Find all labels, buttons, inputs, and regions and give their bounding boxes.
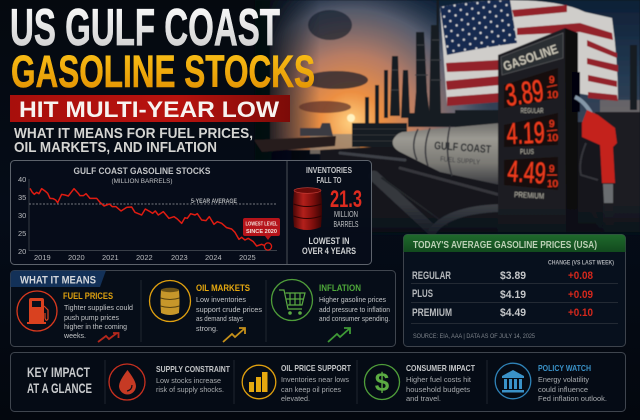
- item: inflation: Higher gasoline prices: [319, 295, 386, 304]
- price rows: PREMIUM: [412, 307, 452, 319]
- item: fuel prices: weeks.: [63, 331, 86, 340]
- item: fuel prices: Tighter supplies could: [64, 303, 133, 312]
- price screens: 4.19: [506, 117, 545, 151]
- storage tank: gulf coast fuel supply: FUEL SUPPLY: [440, 156, 481, 167]
- lowest in over 4 years: OVER 4 YEARS: [302, 246, 356, 257]
- chart title: (MILLION BARRELS): [112, 178, 172, 185]
- item: inflation: and consumer spending.: [319, 314, 390, 323]
- lowest in over 4 years: LOWEST IN: [308, 236, 350, 247]
- item: oil markets: support crude prices: [196, 305, 262, 314]
- panel: key impact at a glance: [10, 352, 626, 412]
- item: oil markets: strong.: [196, 324, 218, 333]
- item: policy watch: POLICY WATCH: [538, 363, 591, 373]
- key figure: 21.3 million barrels: MILLION: [334, 209, 358, 219]
- callout: lowest level: [243, 218, 280, 240]
- ground: [320, 147, 500, 232]
- pump sign: GASOLINE: [501, 41, 560, 74]
- refinery towers: [352, 0, 640, 232]
- inventories text: INVENTORIES: [306, 166, 353, 175]
- price rows: REGULAR: [412, 270, 451, 282]
- item: policy watch: could influence: [538, 385, 588, 394]
- price screens: 10: [547, 133, 559, 144]
- item: supply constraint: [109, 364, 231, 400]
- red banner: hit multi-year low: HIT MULTI-YEAR LOW: [19, 97, 280, 122]
- line chart: 2022: [136, 253, 153, 262]
- chart title: GULF COAST GASOLINE STOCKS: [74, 166, 210, 177]
- line chart: 2024: [205, 253, 222, 262]
- table header: TODAY'S AVERAGE GASOLINE PRICES (USA): [413, 240, 597, 251]
- line chart: 25: [18, 229, 26, 238]
- item: policy watch: Fed inflation outlook.: [538, 394, 607, 403]
- item: oil price support: elevated.: [281, 394, 310, 403]
- fuel nozzle: [575, 97, 617, 232]
- price rows: +0.08: [568, 270, 593, 282]
- line chart: 2019: [34, 253, 51, 262]
- icon: red barrel: [293, 188, 322, 230]
- item: consumer impact: Higher fuel costs hit: [406, 375, 472, 384]
- price rows: $4.49: [500, 307, 526, 319]
- arrow: red trend: [98, 333, 118, 342]
- item: inflation: add pressure to inflation: [319, 305, 390, 314]
- item: fuel prices: higher in the coming: [64, 322, 127, 331]
- key figure: 21.3 million barrels: [330, 186, 362, 229]
- item: oil markets: Low inventories: [196, 295, 246, 304]
- panel: today's average gasoline prices: CHANGE (VS LAST WEEK): [548, 260, 614, 266]
- ship: [254, 136, 336, 152]
- icon: bar chart: [242, 365, 276, 399]
- price screens: 9: [549, 75, 555, 86]
- gas pump: [498, 28, 580, 232]
- icon: shopping cart: [272, 280, 312, 320]
- item: supply constraint: SUPPLY CONSTRAINT: [156, 364, 231, 374]
- price screens: 9: [549, 164, 555, 175]
- water: [310, 134, 360, 154]
- gas pump: PLUS: [520, 149, 534, 156]
- 5-year average label: 5-YEAR AVERAGE: [191, 198, 237, 205]
- panel heading: [27, 364, 92, 396]
- section tab: WHAT IT MEANS: [20, 274, 96, 286]
- panel heading: AT A GLANCE: [27, 380, 92, 396]
- item: fuel prices: [17, 291, 133, 342]
- item: policy watch: Energy volatility: [538, 375, 589, 384]
- icon: oil barrel: [150, 280, 190, 322]
- item: oil price support: [242, 363, 352, 403]
- item: oil price support: can keep oil prices: [281, 385, 341, 394]
- key figure: 21.3 million barrels: BARRELS: [334, 219, 359, 229]
- item: oil markets: as demand stays: [196, 314, 243, 323]
- clouds: [299, 10, 368, 113]
- panel: today's average gasoline prices: [404, 234, 626, 346]
- item: supply constraint: Low stocks increase: [156, 376, 221, 385]
- callout: lowest level: SINCE 2020: [246, 229, 277, 235]
- title: [10, 0, 315, 97]
- item: fuel prices: FUEL PRICES: [63, 291, 113, 302]
- item: supply constraint: risk of supply shocks.: [156, 385, 224, 394]
- key figure: 21.3 million barrels: 21.3: [330, 186, 362, 213]
- item: consumer impact: [364, 363, 476, 403]
- subtitle: [14, 125, 253, 156]
- panel heading: KEY IMPACT: [27, 364, 90, 380]
- line chart: 2020: [68, 253, 85, 262]
- gas pump: REGULAR: [520, 108, 544, 115]
- item: consumer impact: and travel.: [406, 394, 441, 403]
- subtitle: OIL MARKETS, AND INFLATION: [14, 139, 217, 156]
- inventories text: FALL TO: [316, 176, 342, 185]
- subtitle: WHAT IT MEANS FOR FUEL PRICES,: [14, 125, 253, 142]
- price screens: 10: [547, 90, 559, 101]
- panel: stocks chart and inventories: [10, 160, 372, 264]
- item: oil price support: OIL PRICE SUPPORT: [281, 363, 352, 373]
- item: inflation: [272, 280, 390, 342]
- item: oil markets: OIL MARKETS: [196, 283, 250, 294]
- callout: lowest level: LOWEST LEVEL: [246, 222, 278, 228]
- line chart: 35: [18, 193, 26, 202]
- tank label: GULF COAST: [434, 140, 492, 156]
- flag: [440, 0, 618, 106]
- inventories text: [306, 166, 353, 185]
- arrow: gold trend: [223, 328, 245, 342]
- line chart: 30: [18, 211, 26, 220]
- icon: fuel pump: [17, 291, 57, 331]
- icon: bank building: [495, 363, 531, 399]
- line chart: [18, 175, 280, 262]
- item: oil price support: Inventories near lows: [281, 375, 349, 384]
- storage tank: gulf coast fuel supply: [393, 123, 500, 185]
- line chart: 2023: [171, 253, 188, 262]
- price screens: [503, 68, 559, 191]
- item: inflation: INFLATION: [319, 283, 361, 294]
- item: consumer impact: household budgets: [406, 385, 470, 394]
- panel: what it means: [10, 270, 396, 346]
- pipes: [340, 153, 500, 232]
- price rows: [412, 270, 593, 319]
- line chart: 2025: [239, 253, 256, 262]
- price rows: $4.19: [500, 289, 526, 301]
- icon: dollar sign: $: [375, 367, 390, 397]
- item: consumer impact: CONSUMER IMPACT: [406, 363, 476, 373]
- gas pump: PREMIUM: [514, 190, 545, 201]
- chart title: [74, 166, 210, 185]
- title: US GULF COAST: [10, 0, 280, 57]
- lowest point marker: [264, 243, 272, 250]
- hero image: refinery, flag and gas pump: [254, 0, 640, 235]
- arrow: green trend: [328, 328, 350, 342]
- price screens: 10: [547, 179, 559, 190]
- price screens: 4.49: [507, 155, 547, 191]
- price rows: PLUS: [412, 288, 433, 300]
- source note: SOURCE: EIA, AAA | DATA AS OF JULY 14, 2025: [413, 333, 535, 340]
- price rows: +0.10: [568, 307, 593, 319]
- line chart: 40: [18, 175, 26, 184]
- section tab: [10, 270, 106, 287]
- item: policy watch: [495, 363, 607, 403]
- price rows: +0.09: [568, 289, 593, 301]
- title: GASOLINE STOCKS: [11, 46, 315, 97]
- price screens: 3.89: [503, 73, 546, 113]
- icon: oil drop: [109, 364, 145, 400]
- line chart: 2021: [102, 253, 119, 262]
- price screens: 9: [549, 119, 555, 130]
- line chart: 20: [18, 247, 26, 256]
- lowest in over 4 years: [302, 236, 356, 257]
- price rows: $3.89: [500, 270, 526, 282]
- item: oil markets: [150, 280, 262, 342]
- item: fuel prices: push pump prices: [64, 313, 119, 322]
